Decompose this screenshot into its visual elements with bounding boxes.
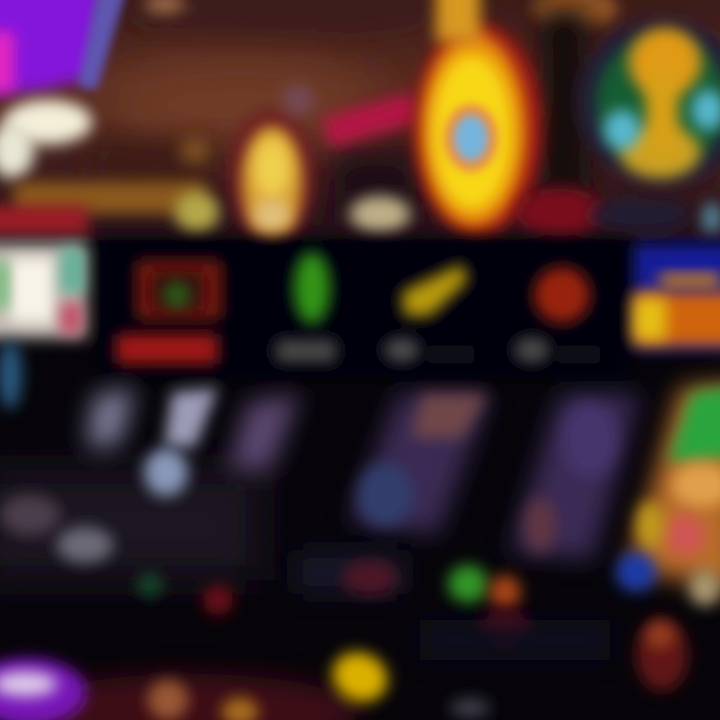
red lights lower right bbox=[636, 619, 688, 691]
far right colourful screen bbox=[616, 382, 720, 606]
ceiling wall bbox=[0, 0, 720, 240]
centre machine screen bbox=[295, 394, 490, 596]
purple light top left bbox=[0, 0, 126, 95]
curved red console bottom bbox=[20, 674, 360, 720]
lower left dim haze bbox=[0, 470, 260, 580]
symbol: red circle bbox=[514, 267, 598, 363]
symbol: green figure bbox=[276, 252, 336, 362]
right coloured machine panel bbox=[634, 244, 720, 350]
machine buttons: green and orange bbox=[420, 565, 610, 660]
symbol: yellow streak bbox=[384, 264, 472, 362]
left lower machine screens bbox=[0, 341, 300, 615]
dim light bottom bbox=[450, 698, 490, 718]
large yellow lamp with blue centre bbox=[414, 0, 604, 236]
dark symbol row bbox=[100, 238, 630, 378]
purple white glow bottom left bbox=[0, 658, 86, 720]
pink bar bbox=[322, 92, 418, 148]
left coloured machine panel bbox=[0, 206, 88, 338]
amber light strip bbox=[14, 136, 410, 232]
right machine screen bbox=[510, 394, 640, 560]
white light blob bbox=[0, 100, 92, 178]
symbol: red square with green centre bbox=[116, 260, 222, 364]
yellow button bottom centre bbox=[324, 643, 396, 711]
prize wheel bbox=[578, 18, 720, 233]
small yellow lamp bbox=[230, 85, 314, 244]
